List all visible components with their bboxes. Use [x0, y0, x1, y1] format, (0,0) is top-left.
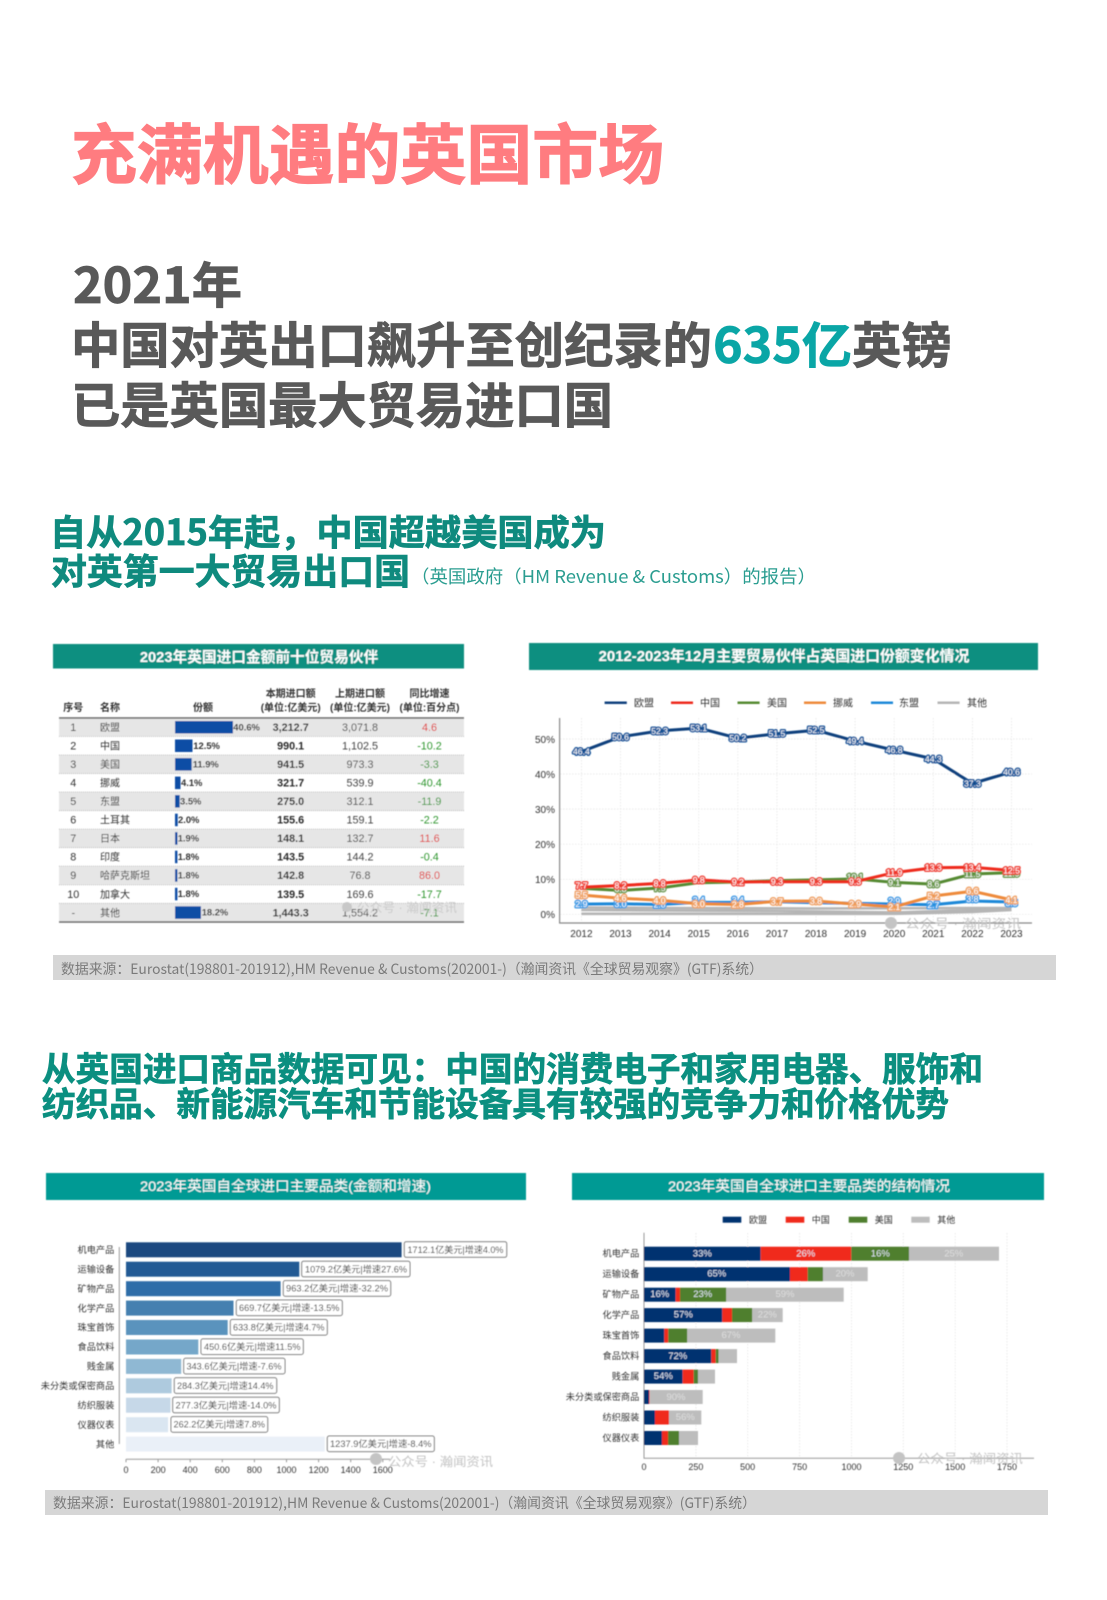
row 8: 8 [70, 852, 76, 864]
line chart header bar: 2012-2023年12月主要贸易伙伴占英国进口份额变化情况 [599, 647, 969, 665]
panel: import structure stacked bar chart [566, 1173, 1044, 1472]
percentage labels [650, 1248, 964, 1423]
row 4: -40.4 [417, 778, 442, 790]
percentage labels: 26% [796, 1248, 816, 1260]
value axis [123, 1459, 393, 1475]
row 1: 40.6% [233, 722, 261, 732]
series: Norway: 2.9 [849, 899, 861, 909]
row 4 [70, 777, 442, 790]
row 2 [70, 740, 442, 752]
value axis: 1600 [373, 1465, 393, 1475]
row other: -7.1 [420, 907, 439, 919]
line chart axes: 2014 [648, 929, 671, 940]
panel: import categories bar chart [41, 1173, 526, 1475]
series: China: 8.8 [654, 878, 666, 888]
row 7: 132.7 [346, 833, 374, 845]
horizontal bars [126, 1242, 402, 1452]
value callout text [174, 1244, 504, 1449]
stacked chart axes: 1250 [893, 1462, 913, 1472]
line chart axes: 2021 [922, 929, 945, 940]
main statement: 2021年 [73, 247, 242, 318]
bar chart header bar [46, 1173, 526, 1200]
series: USA: 6.8 [615, 884, 627, 894]
series: EU: 44.3 [925, 754, 942, 764]
series: EU: 52.3 [651, 726, 668, 736]
percentage labels: 25% [944, 1248, 964, 1260]
table header bar [53, 644, 464, 668]
watermark: 公众号 · 瀚闻资讯 [917, 1451, 1024, 1466]
row 3: 3 [70, 759, 76, 771]
row 7: 1.9% [178, 833, 200, 844]
section heading 1: 对英第一大贸易出口国 [51, 544, 410, 595]
series: China: 9.3 [849, 877, 861, 887]
series: USA: 8.6 [927, 879, 939, 889]
row 2: 中国 [100, 740, 120, 752]
series: EU: 46.8 [886, 745, 903, 755]
row 10 [67, 888, 442, 901]
series: China: 12.5 [1003, 866, 1020, 876]
stacked chart axes [566, 1233, 1034, 1472]
watermark [885, 916, 1022, 931]
line chart axes: 2015 [688, 929, 710, 940]
value axis: 600 [215, 1465, 230, 1475]
series: EU [573, 723, 1020, 788]
source note 1: 数据来源：Eurostat(198801-201912),HM Revenue & Customs(202001-)（瀚闻资讯《全球贸易观察》(GTF)系统） [61, 959, 763, 979]
row 6: 159.1 [346, 815, 374, 827]
stacked chart axes: 贱金属 [612, 1370, 639, 1381]
percentage labels: 67% [721, 1330, 741, 1341]
line chart legend: 美国 [767, 696, 787, 710]
series: ASEAN: 2.9 [888, 896, 900, 906]
row 4: 539.9 [346, 778, 374, 790]
row 6: 155.6 [277, 815, 304, 827]
main statement: 635亿 [713, 307, 852, 378]
row 5: -11.9 [418, 796, 441, 808]
row 3: 美国 [100, 758, 120, 771]
value callout text: 343.6亿美元|增速-7.6% [186, 1360, 282, 1371]
stacked chart legend: 中国 [812, 1214, 830, 1225]
table column headings: 份额 [193, 701, 213, 714]
row 3: 11.9% [193, 758, 219, 770]
series: Norway: 5.5 [575, 890, 588, 900]
table column headings: (单位:亿美元) [330, 701, 390, 714]
percentage labels: 23% [693, 1289, 713, 1300]
row 10: 10 [67, 889, 79, 901]
percentage labels: 54% [654, 1371, 673, 1382]
stacked chart legend: 其他 [937, 1214, 955, 1225]
series: Norway: 4.0 [654, 895, 666, 905]
table header bar: 2023年英国进口金额前十位贸易伙伴 [140, 648, 378, 666]
table column headings: 本期进口额 [266, 687, 316, 700]
stacked chart axes: 0 [641, 1462, 647, 1472]
value axis: 1200 [309, 1465, 329, 1475]
series: China: 13.4 [964, 862, 981, 872]
percentage labels: 16% [871, 1248, 890, 1260]
row 4: 321.7 [277, 778, 304, 790]
line chart axes: 10% [535, 875, 555, 886]
source note 2 [45, 1490, 1048, 1515]
source note 2: 数据来源：Eurostat(198801-201912),HM Revenue & Customs(202001-)（瀚闻资讯《全球贸易观察》(GTF)系统） [53, 1493, 756, 1513]
section heading 2: 纺织品、新能源汽车和节能设备具有较强的竞争力和价格优势 [42, 1077, 949, 1126]
stacked chart axes: 珠宝首饰 [603, 1330, 639, 1340]
row 6: -2.2 [420, 815, 439, 827]
series: Norway: 2.1 [888, 902, 900, 912]
value callout text: 1712.1亿美元|增速4.0% [408, 1244, 504, 1255]
row 7: 日本 [100, 832, 120, 845]
category axis: 机电产品 [78, 1244, 114, 1255]
panel: import share line chart [529, 643, 1038, 940]
value callout text: 262.2亿美元|增速7.8% [174, 1419, 265, 1430]
value callout text: 450.6亿美元|增速11.5% [204, 1341, 300, 1352]
stacked chart axes: 1500 [945, 1462, 965, 1472]
table column headings: 名称 [100, 701, 120, 714]
row other: 1,443.3 [273, 907, 309, 919]
line chart axes [535, 718, 1032, 940]
value callout text: 1237.9亿美元|增速-8.4% [330, 1438, 432, 1449]
line chart legend: 挪威 [833, 696, 853, 710]
stacked chart header bar: 2023年英国自全球进口主要品类的结构情况 [668, 1178, 950, 1194]
title: 充满机遇的英国市场 [71, 103, 664, 197]
row 10: 139.5 [277, 889, 304, 901]
category axis: 未分类或保密商品 [41, 1380, 114, 1391]
series: EU: 46.4 [573, 747, 590, 757]
row 5: 312.1 [346, 796, 374, 808]
row 4: 4.1% [181, 777, 203, 788]
series: China: 9.3 [771, 877, 783, 887]
stacked chart legend: 欧盟 [749, 1214, 767, 1225]
watermark: 公众号 · 瀚闻资讯 [905, 916, 1022, 931]
percentage labels: 33% [693, 1248, 712, 1260]
value axis: 0 [123, 1465, 129, 1475]
series: China: 7.7 [575, 880, 588, 890]
main statement [71, 247, 951, 438]
line chart axes: 40% [535, 770, 555, 781]
series: China: 11.9 [886, 868, 902, 878]
row 5: 275.0 [277, 796, 304, 808]
stacked chart axes: 750 [792, 1462, 807, 1472]
row 9: 哈萨克斯坦 [100, 869, 150, 882]
row 2: 2 [70, 740, 76, 752]
series: ASEAN: 3.0 [615, 899, 627, 909]
row 1: 欧盟 [100, 722, 120, 734]
section heading 1 [50, 505, 816, 595]
series: Norway: 2.8 [732, 900, 744, 910]
row 10: 加拿大 [100, 888, 130, 901]
table column headings: 序号 [63, 701, 83, 714]
stacked chart axes: 化学产品 [603, 1309, 639, 1320]
watermark: 公众号 · 瀚闻资讯 [388, 1454, 494, 1469]
percentage labels: 57% [674, 1310, 693, 1320]
row 3: 973.3 [346, 759, 374, 771]
row 6: 2.0% [178, 814, 200, 825]
row 1: 4.6 [422, 722, 437, 734]
value axis: 800 [247, 1465, 262, 1475]
line chart axes: 2019 [844, 929, 867, 940]
section heading 2 [42, 1042, 983, 1126]
main statement: 已是英国最大贸易进口国 [71, 367, 613, 438]
stacked chart axes: 食品饮料 [603, 1350, 639, 1361]
row 1: 1 [70, 722, 76, 734]
series: Norway [575, 886, 1018, 912]
value callout text: 963.2亿美元|增速-32.2% [286, 1283, 388, 1294]
series: Norway: 4.6 [615, 893, 627, 903]
series: Norway: 3.7 [771, 896, 783, 906]
series: China: 9.2 [732, 877, 744, 887]
row 9: 76.8 [349, 870, 371, 882]
series: ASEAN: 2.9 [575, 899, 588, 909]
line chart axes: 2017 [766, 929, 788, 940]
stacked chart axes: 仪器仪表 [603, 1432, 639, 1443]
row other: 18.2% [202, 907, 229, 918]
series: ASEAN: 3.5 [1006, 898, 1018, 908]
row 9: 86.0 [419, 870, 440, 882]
percentage labels: 59% [775, 1289, 795, 1300]
row other [71, 906, 439, 919]
series: EU: 40.6 [1003, 767, 1020, 777]
series: China: 9.8 [693, 875, 705, 885]
value callouts [171, 1242, 507, 1452]
line chart axes: 2022 [961, 929, 984, 940]
category axis: 其他 [96, 1438, 114, 1449]
row 6: 6 [70, 815, 76, 827]
stacked chart axes: 机电产品 [603, 1248, 639, 1259]
stacked chart axes: 纺织服装 [603, 1411, 639, 1422]
stacked bars: EU [644, 1247, 790, 1445]
watermark: 公众号 · 瀚闻资讯 [357, 900, 458, 915]
row 1 [70, 722, 437, 734]
stacked chart axes: 1000 [841, 1462, 862, 1472]
row 4: 挪威 [100, 777, 120, 790]
line chart axes: 2020 [883, 929, 906, 940]
value callout text: 669.7亿美元|增速-13.5% [239, 1302, 340, 1313]
category axis: 运输设备 [78, 1263, 114, 1274]
table column headings: 同比增速 [410, 687, 450, 700]
stacked chart axes: 未分类或保密商品 [566, 1391, 639, 1402]
series: Norway: 3.0 [693, 899, 705, 909]
value callout text: 284.3亿美元|增速14.4% [177, 1380, 274, 1391]
stacked chart header bar [572, 1173, 1044, 1200]
line chart legend: 其他 [967, 696, 987, 710]
table column headings [63, 687, 460, 714]
series: ASEAN: 2.7 [927, 900, 939, 910]
stacked bars: China [649, 1247, 851, 1445]
section heading 2: 从英国进口商品数据可见：中国的消费电子和家用电器、服饰和 [42, 1042, 983, 1091]
watermark [370, 1453, 494, 1469]
row 2: 12.5% [193, 740, 221, 751]
row other: 1,554.2 [342, 907, 378, 919]
category axis: 纺织服装 [78, 1399, 114, 1410]
series: EU: 51.5 [769, 729, 785, 739]
line chart axes: 2013 [609, 929, 632, 940]
stacked chart axes: 矿物产品 [603, 1289, 639, 1300]
source note 1 [53, 955, 1056, 980]
stacked chart legend: 美国 [875, 1214, 893, 1225]
row 5: 3.5% [180, 796, 202, 806]
percentage labels: 72% [668, 1351, 688, 1362]
series: USA: 7.5 [654, 883, 666, 893]
series: EU: 37.3 [964, 778, 981, 788]
series: USA: 11.9 [1003, 868, 1020, 878]
category axis: 化学产品 [78, 1302, 114, 1313]
panel: top ten trade partners table [53, 644, 464, 922]
value callout text: 1079.2亿美元|增速27.6% [305, 1263, 407, 1274]
table row shading [59, 718, 464, 922]
percentage labels: 56% [676, 1412, 695, 1423]
bar chart header bar: 2023年英国自全球进口主要品类(金额和增速) [140, 1178, 431, 1194]
line chart axes: 20% [535, 840, 555, 851]
row 3 [70, 758, 439, 771]
line chart axes: 2012 [570, 929, 593, 940]
stacked chart axes: 250 [688, 1462, 703, 1472]
row 7 [70, 832, 440, 845]
series: ASEAN: 3.8 [966, 894, 979, 904]
main statement: 英镑 [852, 307, 951, 378]
category axis: 矿物产品 [78, 1283, 114, 1294]
row 5 [70, 795, 441, 808]
category axis: 贱金属 [87, 1361, 114, 1372]
row 7: 11.6 [419, 833, 440, 845]
row 9: 9 [70, 870, 76, 882]
value axis: 1000 [276, 1465, 297, 1475]
section heading 1: 自从2015年起，中国超越美国成为 [50, 505, 606, 556]
series: EU: 49.4 [847, 736, 864, 746]
stacked bars: other [650, 1247, 999, 1445]
value axis: 200 [151, 1465, 166, 1475]
percentage labels: 22% [758, 1310, 777, 1320]
row 8: 144.2 [346, 852, 374, 864]
row 7: 7 [70, 833, 76, 845]
row 6 [70, 814, 439, 827]
series: EU: 50.2 [729, 733, 746, 743]
section heading 1: （英国政府（HM Revenue & Customs）的报告） [411, 563, 816, 589]
table column headings: (单位:百分点) [400, 701, 460, 714]
percentage labels: 16% [650, 1289, 670, 1300]
stacked chart axes: 1750 [997, 1462, 1017, 1472]
stacked chart axes: 运输设备 [603, 1268, 639, 1279]
series: Norway: 5.2 [927, 891, 939, 901]
series: Norway: 4.1 [1006, 895, 1018, 905]
value callout text: 277.3亿美元|增速-14.0% [176, 1399, 276, 1410]
row 10: 169.6 [346, 889, 374, 901]
row 4: 4 [70, 778, 76, 790]
category axis: 仪器仪表 [78, 1419, 114, 1430]
percentage labels: 20% [835, 1268, 855, 1280]
series: ASEAN [575, 894, 1018, 910]
category axis: 珠宝首饰 [78, 1322, 114, 1333]
category axis [41, 1244, 119, 1449]
series: ASEAN: 2.8 [654, 900, 666, 910]
series: China [575, 862, 1020, 890]
value callout text: 633.8亿美元|增速4.7% [233, 1322, 324, 1333]
series: USA: 9.1 [888, 877, 900, 887]
row 7: 148.1 [277, 833, 304, 845]
value axis: 400 [183, 1465, 198, 1475]
series: other [581, 908, 1012, 914]
row 2: -10.2 [417, 740, 442, 752]
row 3: -3.3 [420, 759, 439, 771]
series: USA: 10.1 [847, 872, 864, 882]
row 8: 143.5 [277, 852, 304, 864]
row 9: 1.8% [178, 870, 200, 881]
line chart axes: 2023 [1000, 929, 1023, 940]
row 8: 1.8% [178, 851, 200, 862]
row 3: 941.5 [277, 759, 304, 771]
line chart legend: 东盟 [899, 696, 919, 710]
table column headings: (单位:亿美元) [261, 701, 321, 714]
stacked bars: USA [668, 1247, 909, 1445]
percentage labels: 90% [666, 1392, 686, 1403]
row 8: 印度 [100, 851, 120, 864]
category axis: 食品饮料 [78, 1341, 114, 1352]
series: China: 9.3 [810, 877, 822, 887]
stacked chart legend [723, 1214, 955, 1225]
line chart axes: 30% [535, 805, 555, 816]
line chart legend: 中国 [700, 696, 720, 710]
row 10: -17.7 [417, 889, 442, 901]
row 5: 东盟 [100, 795, 120, 808]
main statement: 中国对英出口飙升至创纪录的 [71, 307, 712, 378]
line chart legend [605, 696, 987, 710]
series: USA [581, 868, 1020, 894]
series: Norway: 6.6 [966, 886, 979, 896]
row other: 其他 [100, 906, 120, 919]
row 9 [70, 869, 440, 882]
series: EU: 52.5 [808, 725, 825, 735]
line chart header bar [529, 643, 1038, 670]
line chart axes: 0% [541, 910, 555, 921]
row other: - [71, 907, 75, 919]
value axis: 1400 [341, 1465, 361, 1475]
stacked chart axes: 500 [740, 1462, 755, 1472]
row 10: 1.8% [178, 888, 200, 899]
row 6: 土耳其 [100, 814, 130, 827]
line chart legend: 欧盟 [634, 698, 654, 710]
row 2: 1,102.5 [342, 740, 378, 752]
row 5: 5 [70, 796, 76, 808]
row 1: 3,212.7 [273, 722, 309, 734]
series: USA: 11.5 [964, 869, 981, 879]
series: EU: 50.6 [612, 732, 629, 742]
row 8 [70, 851, 439, 864]
series: ASEAN: 3.4 [732, 895, 744, 905]
series: China: 13.3 [925, 863, 942, 873]
row 2: 990.1 [277, 740, 304, 752]
row 1: 3,071.8 [342, 722, 378, 734]
share bars [175, 721, 233, 919]
line chart axes: 50% [535, 735, 555, 746]
line chart axes: 2016 [727, 929, 749, 940]
series: Norway: 3.8 [810, 896, 822, 906]
percentage labels: 65% [707, 1268, 727, 1280]
series: EU: 53.1 [690, 723, 707, 733]
table column headings: 上期进口额 [335, 687, 385, 700]
series: ASEAN: 3.4 [693, 895, 705, 905]
line chart axes: 2018 [805, 929, 828, 940]
row 9: 142.8 [277, 870, 304, 882]
series: China: 8.2 [615, 880, 627, 890]
row 8: -0.4 [420, 852, 439, 864]
